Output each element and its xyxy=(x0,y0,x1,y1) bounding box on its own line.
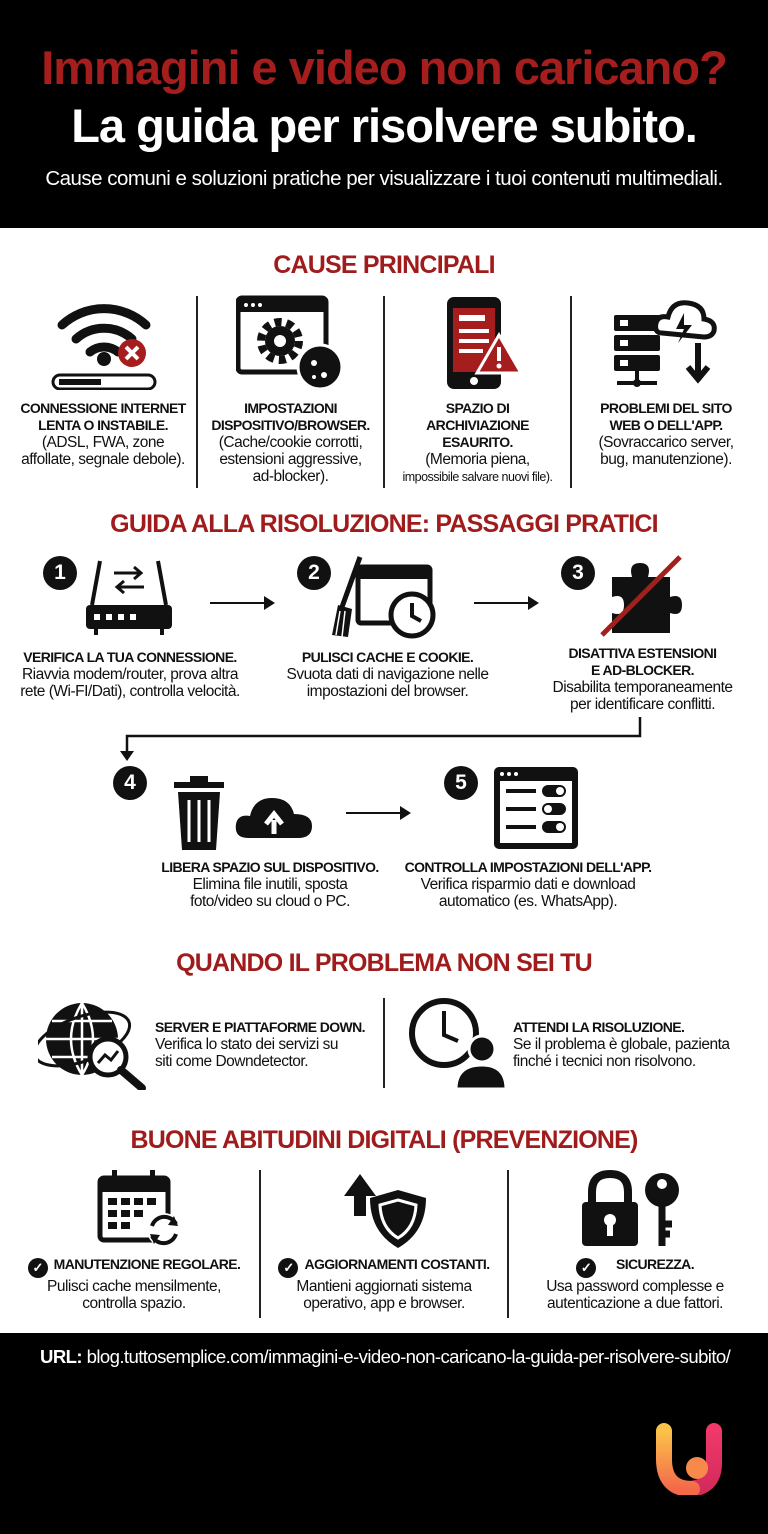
step 1 xyxy=(20,556,240,700)
item: attendi: Se il problema è globale, pazienta xyxy=(513,1036,730,1053)
cause 3: impossibile salvare nuovi file). xyxy=(402,470,553,484)
step 4: Elimina file inutili, sposta xyxy=(193,876,347,893)
text xyxy=(20,400,186,468)
habit 2: AGGIORNAMENTI COSTANTI. xyxy=(304,1256,490,1272)
icon: trash cloud xyxy=(174,776,312,850)
cause 2: IMPOSTAZIONI xyxy=(244,400,337,416)
cause 4: PROBLEMI DEL SITO xyxy=(600,400,732,416)
cause 4 xyxy=(598,300,734,468)
habit 1: MANUTENZIONE REGOLARE. xyxy=(54,1256,240,1272)
step 2: impostazioni del browser. xyxy=(307,683,468,700)
step 4: 4 xyxy=(124,771,136,794)
cause 2: estensioni aggressive, xyxy=(219,451,362,468)
item: server down: SERVER E PIATTAFORME DOWN. xyxy=(155,1019,365,1035)
cause 4: WEB O DELL'APP. xyxy=(609,417,723,433)
text: affollate, segnale debole). xyxy=(21,451,185,468)
step 3: Disabilita temporaneamente xyxy=(552,679,732,696)
header xyxy=(0,0,768,228)
icon: calendar refresh xyxy=(98,1170,178,1246)
habit 3: Usa password complesse e xyxy=(546,1278,724,1295)
heading: buone abitudini: BUONE ABITUDINI DIGITALI (PREVENZIONE) xyxy=(130,1126,638,1154)
icon: puzzle crossed xyxy=(600,555,682,637)
cause 2: (Cache/cookie corrotti, xyxy=(219,434,362,451)
heading: cause principali: CAUSE PRINCIPALI xyxy=(273,251,495,279)
item: attendi: ATTENDI LA RISOLUZIONE. xyxy=(513,1019,684,1035)
cause 3 xyxy=(402,297,553,484)
step 5 xyxy=(405,766,652,910)
habit 3 xyxy=(546,1170,724,1312)
step 5: Verifica risparmio dati e download xyxy=(421,876,635,893)
icon: browser gear cookie xyxy=(236,296,340,388)
step 4: LIBERA SPAZIO SUL DISPOSITIVO. xyxy=(161,859,379,875)
cause 1 xyxy=(20,304,186,468)
habit 2: operativo, app e browser. xyxy=(303,1295,465,1312)
icon: router xyxy=(86,560,172,635)
title line 2: La guida per risolvere subito. xyxy=(71,99,697,152)
step 3: per identificare conflitti. xyxy=(570,696,715,713)
icon: update shield xyxy=(344,1174,426,1248)
icon: server cloud xyxy=(614,300,717,387)
step 1: 1 xyxy=(54,561,66,584)
step 2: Svuota dati di navigazione nelle xyxy=(286,666,488,683)
arrow xyxy=(210,602,273,604)
step 3: DISATTIVA ESTENSIONI xyxy=(568,645,716,661)
habit 1: controlla spazio. xyxy=(82,1295,186,1312)
arrow xyxy=(346,812,409,814)
icon: broom clock xyxy=(332,556,436,638)
habit 3: ✓ xyxy=(581,1260,591,1275)
habit 3: autenticazione a due fattori. xyxy=(547,1295,723,1312)
habit 2: Mantieni aggiornati sistema xyxy=(296,1278,472,1295)
url: URL: blog.tuttosemplice.com/immagini-e-video-non-caricano-la-guida-per-risolvere-subito/ xyxy=(40,1346,730,1367)
icon: lock key xyxy=(582,1170,679,1246)
item: server down: siti come Downdetector. xyxy=(155,1053,308,1070)
text: LENTA O INSTABILE. xyxy=(38,417,168,433)
item: server down xyxy=(38,1003,365,1090)
step 1: rete (Wi-FI/Dati), controlla velocità. xyxy=(20,683,240,700)
icon: settings window xyxy=(494,767,578,849)
icon: phone warning xyxy=(447,297,518,389)
habit 1: ✓ xyxy=(32,1260,43,1275)
arrow xyxy=(474,602,537,604)
step 1: VERIFICA LA TUA CONNESSIONE. xyxy=(23,649,237,665)
cause 2 xyxy=(211,296,370,485)
habit 2: ✓ xyxy=(283,1260,294,1275)
habit 1 xyxy=(28,1170,240,1312)
cause 3: (Memoria piena, xyxy=(425,451,530,468)
cause 3: ARCHIVIAZIONE xyxy=(426,417,529,433)
step 2 xyxy=(286,556,488,700)
step 2: 2 xyxy=(308,561,320,584)
step 3 xyxy=(552,555,732,713)
arrow: connector xyxy=(120,717,642,761)
step 2: PULISCI CACHE E COOKIE. xyxy=(302,649,473,665)
cause 4: (Sovraccarico server, xyxy=(598,434,734,451)
step 5: CONTROLLA IMPOSTAZIONI DELL'APP. xyxy=(405,859,651,875)
cause 3: SPAZIO DI xyxy=(446,400,509,416)
icon: wifi xyxy=(52,304,156,390)
cause 2: DISPOSITIVO/BROWSER. xyxy=(211,417,370,433)
cause 3: ESAURITO. xyxy=(442,434,513,450)
step 4: foto/video su cloud o PC. xyxy=(190,893,350,910)
logo xyxy=(656,1423,722,1495)
title line 1: Immagini e video non caricano? xyxy=(41,41,727,94)
step 1: Riavvia modem/router, prova altra xyxy=(22,666,238,683)
heading: quando il problema non sei tu: QUANDO IL PROBLEMA NON SEI TU xyxy=(176,949,592,977)
item: server down: Verifica lo stato dei servizi su xyxy=(155,1036,338,1053)
step 5: 5 xyxy=(455,771,467,794)
subtitle: Cause comuni e soluzioni pratiche per visualizzare i tuoi contenuti multimediali. xyxy=(45,167,723,190)
step 5: automatico (es. WhatsApp). xyxy=(439,893,617,910)
habit 2 xyxy=(278,1174,490,1312)
icon: clock person xyxy=(409,998,504,1088)
habit 3: SICUREZZA. xyxy=(616,1256,694,1272)
step 3: 3 xyxy=(572,561,584,584)
text: CONNESSIONE INTERNET xyxy=(20,400,186,416)
cause 2: ad-blocker). xyxy=(253,468,328,485)
cause 4: bug, manutenzione). xyxy=(600,451,732,468)
heading: guida: GUIDA ALLA RISOLUZIONE: PASSAGGI PRATICI xyxy=(110,510,658,538)
step 4 xyxy=(113,766,379,910)
item: attendi xyxy=(409,998,730,1088)
icon: globe magnifier xyxy=(38,1003,146,1090)
text: (ADSL, FWA, zone xyxy=(42,434,164,451)
step 3: E AD-BLOCKER. xyxy=(591,662,694,678)
item: attendi: finché i tecnici non risolvono. xyxy=(513,1053,696,1070)
footer xyxy=(0,1333,768,1534)
habit 1: Pulisci cache mensilmente, xyxy=(47,1278,221,1295)
